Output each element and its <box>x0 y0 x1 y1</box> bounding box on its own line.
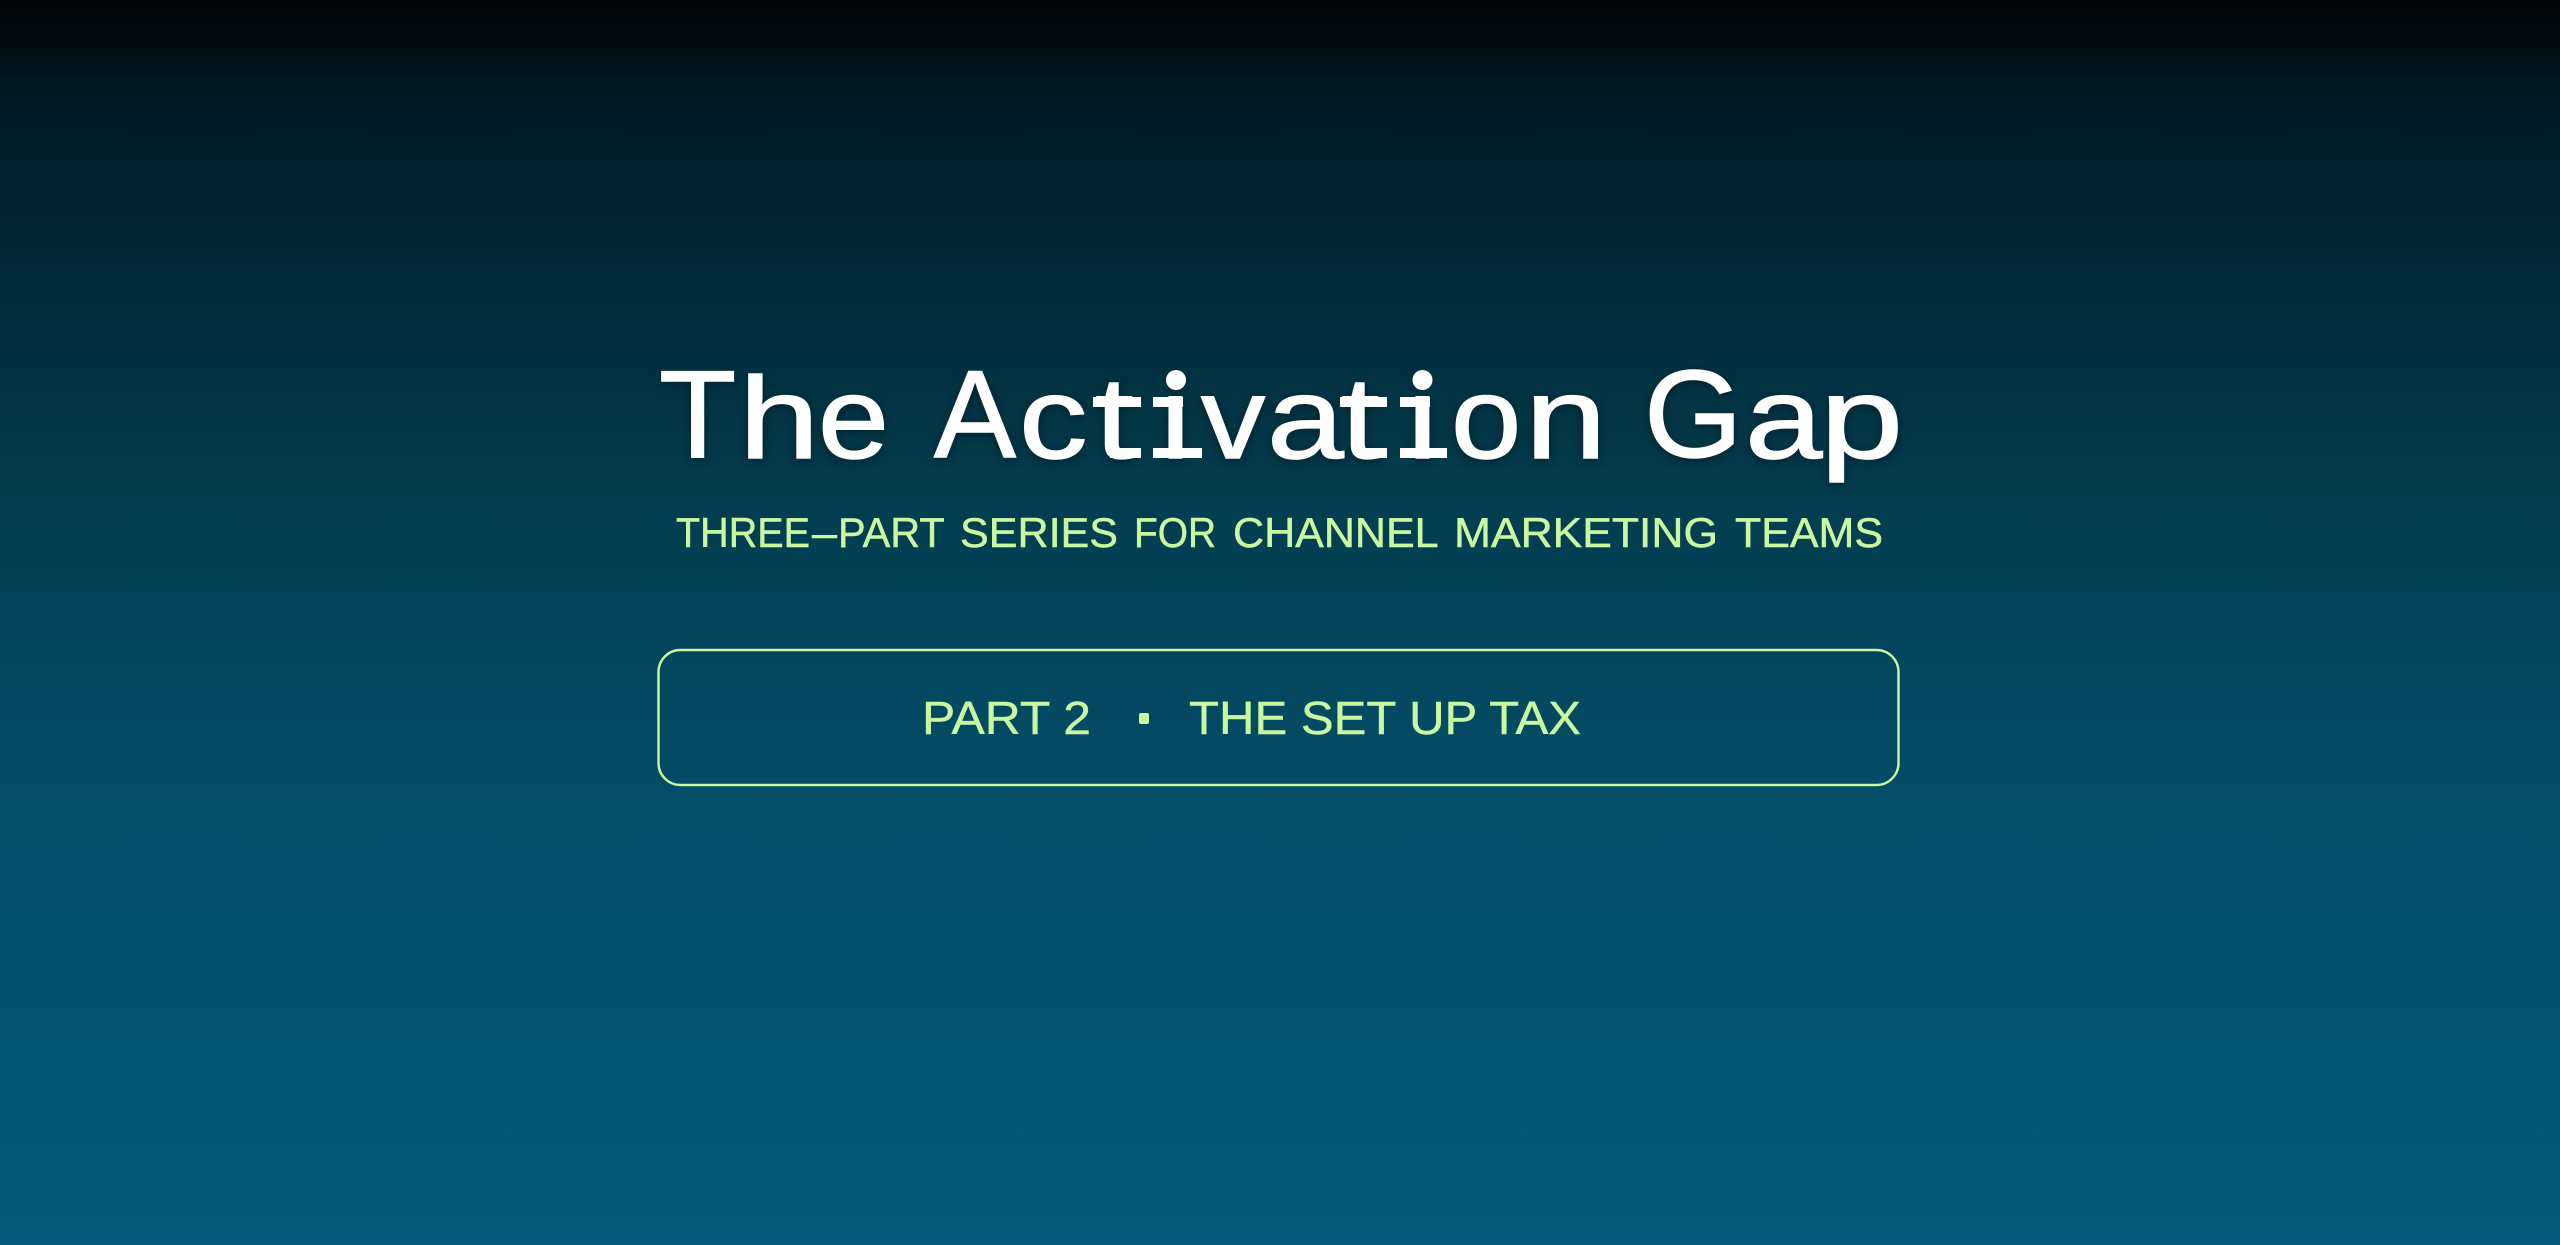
title: t <box>1341 353 1380 483</box>
title: e <box>818 353 889 483</box>
title: a <box>1267 353 1344 483</box>
badge part title: THE SET UP TAX <box>1189 692 1581 744</box>
title <box>659 346 1903 487</box>
subtitle: MARKETING <box>1454 509 1718 556</box>
subtitle: THREE <box>676 509 810 556</box>
subtitle: CHANNEL <box>1233 509 1437 556</box>
badge separator dot <box>1139 713 1149 724</box>
title: c <box>1019 353 1087 483</box>
badge part number: PART 2 <box>922 692 1091 744</box>
title: a <box>1745 353 1822 483</box>
title: v <box>1201 353 1266 483</box>
title: t <box>1095 353 1134 483</box>
title: G <box>1644 346 1743 484</box>
title: i <box>1407 353 1438 483</box>
title: n <box>1525 353 1607 483</box>
subtitle: PART <box>838 509 944 556</box>
part badge <box>658 650 1898 785</box>
badge outline <box>658 650 1898 785</box>
title: i <box>1160 353 1191 483</box>
title: A <box>934 346 1016 484</box>
subtitle: SERIES <box>960 509 1118 556</box>
title: o <box>1450 353 1521 483</box>
subtitle: – <box>812 509 838 556</box>
subtitle: FOR <box>1134 509 1216 556</box>
subtitle: TEAMS <box>1735 509 1883 556</box>
title: p <box>1820 353 1903 483</box>
title: T <box>659 346 737 484</box>
title: h <box>738 353 819 483</box>
